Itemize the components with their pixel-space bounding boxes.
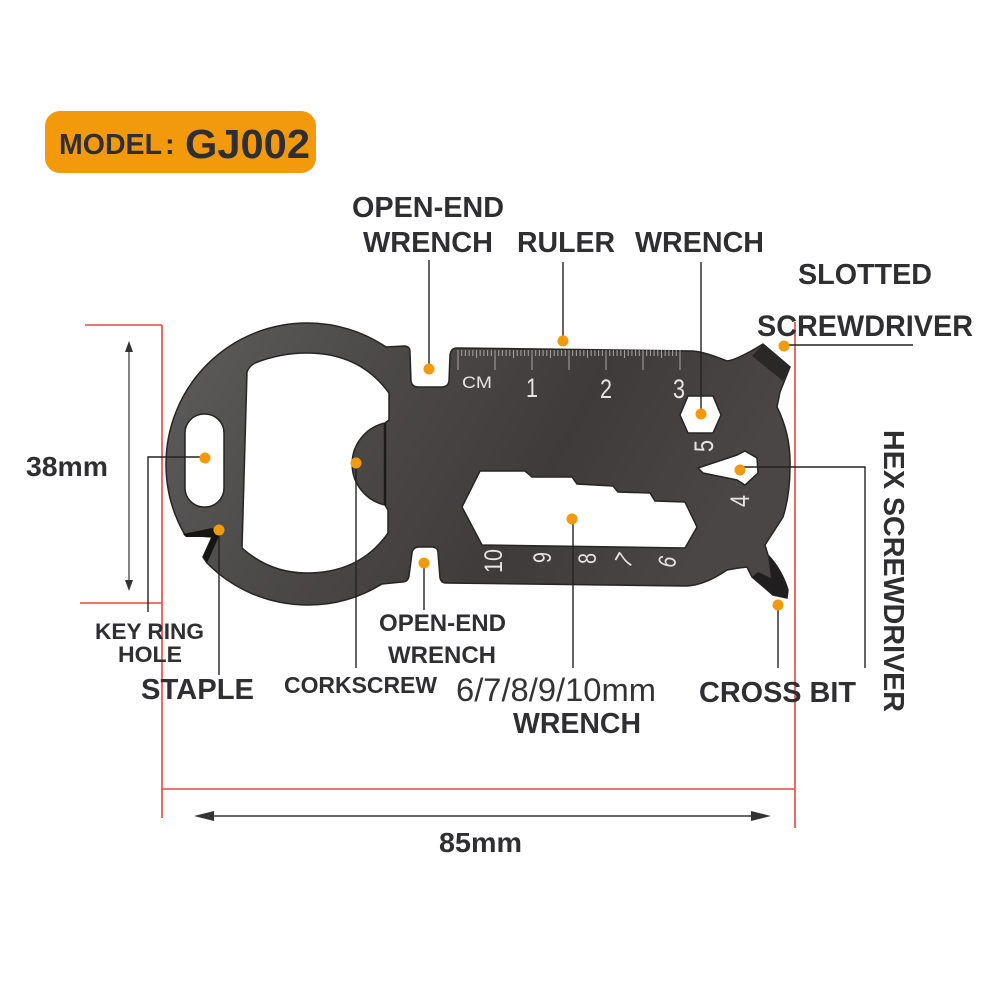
label: open-end wrench top (352, 192, 504, 259)
label: ruler: RULER (517, 227, 615, 259)
label: key ring hole: HOLE (118, 642, 182, 667)
ruler and wrench size numbers: 4 (725, 495, 755, 507)
leader lines (148, 260, 913, 675)
dimension arrow: 85mm (194, 811, 771, 821)
label: staple: STAPLE (141, 674, 254, 706)
label: wrench sizes: 6/7/8/9/10mm (456, 672, 656, 708)
staple notch (183, 528, 220, 563)
dimension arrow: 38mm (125, 341, 133, 591)
ruler and wrench size numbers: 3 (673, 374, 685, 404)
ruler and wrench size numbers: CM (462, 373, 492, 392)
slotted screwdriver tip (752, 344, 790, 381)
ruler ticks (458, 350, 680, 370)
label: corkscrew: CORKSCREW (284, 672, 437, 698)
cross bit tip (752, 555, 788, 598)
ruler and wrench size numbers (462, 373, 755, 573)
label: open-end wrench bottom: WRENCH (388, 642, 496, 669)
label: wrench sizes (456, 672, 656, 740)
label: wrench: WRENCH (635, 227, 764, 259)
label: open-end wrench bottom: OPEN-END (379, 610, 506, 637)
label: 38mm: 38mm (26, 451, 108, 482)
label: open-end wrench bottom (379, 610, 506, 669)
ruler and wrench size numbers: 6 (653, 553, 683, 571)
label: hex screwdriver: HEX SCREWDRIVER (877, 430, 909, 712)
ruler and wrench size numbers: 9 (529, 552, 557, 563)
model badge (45, 111, 316, 173)
label: slotted screwdriver: SLOTTED (798, 259, 932, 291)
label: key ring hole: KEY RING (95, 619, 204, 644)
ruler and wrench size numbers: 7 (610, 548, 640, 572)
tool body (166, 323, 790, 605)
label: 85mm: 85mm (439, 827, 522, 858)
label: slotted screwdriver (757, 259, 973, 343)
label: cross bit: CROSS BIT (699, 677, 856, 709)
label: slotted screwdriver: SCREWDRIVER (757, 310, 973, 343)
corkscrew edge (384, 423, 386, 505)
label: wrench sizes: WRENCH (513, 708, 641, 740)
model badge: MODEL (59, 129, 162, 161)
label: open-end wrench top: WRENCH (363, 227, 493, 259)
ruler and wrench size numbers: 2 (600, 374, 612, 404)
label: key ring hole (95, 619, 204, 667)
ruler and wrench size numbers: 5 (689, 440, 719, 452)
ruler and wrench size numbers: 10 (480, 549, 508, 573)
orange marker dots (200, 336, 790, 610)
red dimension lines (80, 322, 795, 828)
model badge: GJ002 (185, 121, 310, 167)
ruler and wrench size numbers: 8 (574, 553, 602, 564)
label: open-end wrench top: OPEN-END (352, 192, 504, 224)
ruler and wrench size numbers: 1 (526, 373, 538, 403)
model badge: : (165, 129, 175, 161)
